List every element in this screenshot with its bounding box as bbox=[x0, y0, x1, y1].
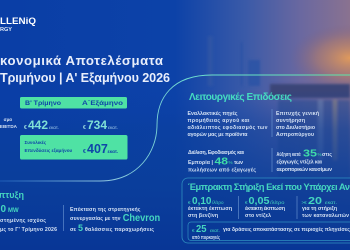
block: refining exports 48% bbox=[188, 150, 256, 174]
Chevron partnership text: θαλάσσιες παραχωρήσεις bbox=[85, 227, 154, 233]
heading: operational performance: Λειτουργικές Επιδόσεις bbox=[189, 92, 292, 103]
stat: diesel discount: € bbox=[245, 200, 248, 205]
block: alternative supply: προμήθειας αργού και bbox=[188, 118, 250, 124]
callout: wildfire relief: 25 bbox=[196, 224, 207, 235]
Chevron partnership text: Chevron bbox=[123, 213, 160, 224]
stat: diesel discount: /λίτρο bbox=[270, 200, 285, 205]
decorative curve line bbox=[0, 75, 350, 181]
total investments box: € bbox=[83, 149, 86, 155]
panel: operational performance bbox=[188, 92, 332, 174]
Chevron partnership text: 5 bbox=[78, 223, 83, 233]
block: refinery maintenance: Επιτυχής γενική bbox=[276, 111, 319, 117]
adjusted EBITDA row: 734 bbox=[87, 118, 107, 132]
adjusted EBITDA row: EBITDA bbox=[0, 124, 18, 129]
title bbox=[0, 53, 170, 85]
title: Τριμήνου | Α' Εξαμήνου 2026 bbox=[0, 71, 170, 85]
Chevron partnership text bbox=[70, 207, 160, 233]
block: exports increase 35%: 35 bbox=[303, 148, 318, 160]
block: exports increase 35% bbox=[276, 148, 332, 173]
table header tab: Β' Τρίμηνο bbox=[25, 100, 61, 107]
logo: Helleniq Energy: RGY bbox=[0, 27, 12, 33]
block: exports increase 35%: εξαγωγές ντίζελ και bbox=[276, 160, 323, 166]
total investments box: Επενδύσεις εξαμήνου bbox=[24, 148, 73, 154]
adjusted EBITDA row: εκατ. bbox=[49, 125, 59, 130]
panel: financial results bbox=[0, 97, 128, 160]
table header tab: Α΄Εξάμηνο bbox=[82, 100, 123, 107]
block: alternative supply: αγορών μας με προϊόντα bbox=[188, 132, 248, 138]
stat: consumer support bbox=[302, 196, 349, 219]
block: exports increase 35%: Αύξηση κατά bbox=[276, 152, 301, 158]
stat: consumer support: εκατ. bbox=[325, 200, 337, 205]
block: refining exports 48%: των bbox=[234, 160, 243, 166]
capacity text: μς το Γ' Τρίμηνο 2026 bbox=[0, 227, 57, 233]
block: refining exports 48%: πωλήσεων από εξαγωγές bbox=[188, 168, 256, 174]
callout: wildfire relief: € bbox=[192, 228, 195, 233]
adjusted EBITDA row: € bbox=[24, 125, 27, 131]
stat: consumer support: 20 bbox=[308, 196, 323, 207]
adjusted EBITDA row: σμα bbox=[4, 117, 12, 122]
capacity text bbox=[0, 204, 57, 233]
title: κονομικά Αποτελέσματα bbox=[0, 53, 163, 68]
adjusted EBITDA row: 442 bbox=[28, 118, 48, 132]
block: exports increase 35%: αεροπορικών καυσίμων bbox=[276, 167, 332, 173]
heading: practical support: Έμπρακτη Στήριξη Εκεί που Υπάρχει Αν bbox=[188, 181, 350, 192]
block: refining exports 48%: 48 bbox=[214, 156, 229, 168]
Chevron partnership text: Επέκταση της στρατηγικής bbox=[70, 207, 141, 213]
callout: wildfire relief: από πυρκαγιές bbox=[192, 235, 220, 241]
block: refinery maintenance: στο Διυλιστήριο bbox=[276, 125, 315, 131]
callout: wildfire relief: εκατ. bbox=[210, 228, 220, 233]
stat: diesel discount bbox=[245, 196, 285, 219]
stat: petrol discount: έκτακτη έκπτωση bbox=[188, 206, 232, 212]
total investments box bbox=[20, 135, 128, 160]
block: refining exports 48%: Διύλιση, Εφοδιασμός και bbox=[188, 150, 245, 156]
adjusted EBITDA row: € bbox=[83, 125, 86, 131]
callout: wildfire relief bbox=[188, 222, 350, 241]
block: alternative supply: αδιάλειπτος εφοδιασμός των bbox=[188, 125, 268, 131]
total investments box: Συνολικές bbox=[24, 140, 47, 146]
block: alternative supply: Εναλλακτικές πηγές bbox=[188, 111, 238, 117]
capacity text: 0 bbox=[0, 204, 6, 215]
callout: wildfire relief: για δράσεις αποκατάστασης σε περιοχές πληγείσες bbox=[223, 227, 350, 233]
block: refining exports 48%: % bbox=[228, 160, 233, 165]
panel: development bbox=[0, 190, 160, 233]
stat: consumer support: >€ bbox=[302, 200, 307, 205]
Chevron partnership text: συνεργασίας με την bbox=[70, 216, 121, 222]
divider bbox=[62, 205, 64, 231]
stat: petrol discount: € bbox=[188, 200, 191, 205]
block: exports increase 35%: στις bbox=[322, 152, 332, 158]
stat: petrol discount: 0,10 bbox=[192, 196, 212, 207]
total investments box: εκατ. bbox=[108, 149, 118, 154]
panel: practical support bbox=[182, 178, 350, 243]
table header tab bbox=[20, 97, 127, 108]
stat: diesel discount: στο ντίζελ bbox=[245, 213, 271, 219]
stat: petrol discount bbox=[188, 196, 232, 219]
adjusted EBITDA row: εκατ. bbox=[108, 125, 118, 130]
logo: Helleniq Energy bbox=[0, 16, 37, 33]
block: refinery maintenance: συντήρηση bbox=[276, 118, 305, 124]
Chevron partnership text: σε bbox=[70, 227, 77, 233]
block: refining exports 48%: Εμπορία | bbox=[188, 160, 214, 166]
stat: petrol discount: /λίτρο bbox=[212, 200, 224, 205]
block: refinery maintenance: Ασπροπύργου bbox=[276, 132, 314, 138]
capacity text: MW bbox=[8, 208, 19, 214]
capacity text: στημένης ισχύος bbox=[0, 218, 46, 224]
stat: consumer support: για τη στήριξη bbox=[302, 206, 337, 212]
block: refinery maintenance bbox=[276, 111, 319, 138]
stat: petrol discount: στη βενζίνη bbox=[188, 213, 218, 219]
total investments box: 407 bbox=[87, 142, 108, 156]
block: alternative supply bbox=[188, 111, 268, 138]
block: exports increase 35%: % bbox=[318, 152, 322, 157]
logo: Helleniq Energy: LLENiQ bbox=[0, 16, 37, 27]
adjusted EBITDA row bbox=[0, 117, 118, 132]
stat: diesel discount: 0,05 bbox=[248, 196, 270, 207]
stat: diesel discount: έκτακτη έκπτωση bbox=[245, 206, 285, 212]
stat: consumer support: των καταναλωτών bbox=[302, 213, 349, 219]
